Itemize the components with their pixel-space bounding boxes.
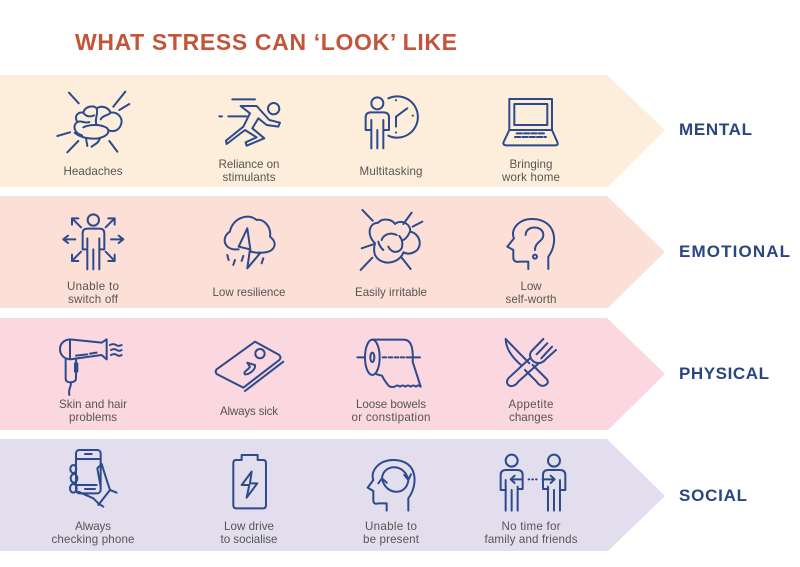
label: always checking phone bbox=[52, 520, 134, 546]
label: no time for family and friends bbox=[484, 520, 578, 546]
icon: storm cloud bbox=[225, 217, 275, 268]
label: no time for family and friends: No time for bbox=[502, 520, 561, 533]
mental arrow band bbox=[0, 75, 665, 187]
physical heading: PHYSICAL bbox=[679, 364, 769, 383]
label: loose bowels or constipation: Loose bowels bbox=[356, 398, 426, 411]
icon: running figure bbox=[219, 99, 280, 146]
icon: hand holding phone bbox=[70, 450, 117, 507]
label: always sick: Always sick bbox=[220, 405, 278, 418]
label: reliance on stimulants bbox=[218, 158, 280, 184]
icon: head with circular arrows bbox=[368, 460, 415, 511]
label: unable to switch off: switch off bbox=[68, 293, 119, 306]
icon: head with question mark bbox=[507, 219, 554, 269]
panel: physical bbox=[0, 318, 769, 430]
panel: emotional bbox=[0, 196, 790, 308]
social heading: SOCIAL bbox=[679, 486, 747, 505]
label: unable to be present: Unable to bbox=[365, 520, 417, 533]
label: appetite changes bbox=[508, 398, 554, 424]
label: unable to be present bbox=[363, 520, 420, 546]
label: low self-worth: self-worth bbox=[506, 293, 556, 306]
label: low drive to socialise bbox=[220, 520, 278, 546]
label: low self-worth bbox=[506, 280, 556, 306]
label: no time for family and friends: family and friends bbox=[484, 533, 578, 546]
label: bringing work home: work home bbox=[501, 171, 560, 184]
label: unable to switch off bbox=[67, 280, 119, 306]
label: skin and hair problems: problems bbox=[69, 411, 117, 424]
title: WHAT STRESS CAN ‘LOOK’ LIKE bbox=[75, 29, 457, 55]
emotional arrow band bbox=[0, 196, 665, 308]
label: appetite changes: Appetite bbox=[508, 398, 554, 411]
physical arrow band bbox=[0, 318, 665, 430]
label: unable to switch off: Unable to bbox=[67, 280, 119, 293]
label: bringing work home bbox=[501, 158, 560, 184]
icon: laptop bbox=[503, 99, 558, 145]
panel: social bbox=[0, 439, 747, 551]
label: headaches: Headaches bbox=[64, 165, 123, 178]
icon: irritable cloud with rays bbox=[361, 210, 422, 270]
label: easily irritable: Easily irritable bbox=[355, 286, 427, 299]
emotional heading: EMOTIONAL bbox=[679, 242, 790, 261]
label: multitasking: Multitasking bbox=[360, 165, 422, 178]
label: always checking phone: checking phone bbox=[52, 533, 134, 546]
label: reliance on stimulants: Reliance on bbox=[218, 158, 280, 171]
label: skin and hair problems: Skin and hair bbox=[59, 398, 127, 411]
label: low self-worth: Low bbox=[520, 280, 542, 293]
label: loose bowels or constipation bbox=[352, 398, 430, 424]
label: low resilience: Low resilience bbox=[212, 286, 286, 299]
icon: headaches brain bbox=[57, 92, 129, 152]
label: always checking phone: Always bbox=[75, 520, 111, 533]
icon: hair dryer bbox=[60, 339, 122, 395]
label: skin and hair problems bbox=[59, 398, 127, 424]
icon: crossed knife and fork bbox=[506, 339, 556, 386]
label: reliance on stimulants: stimulants bbox=[222, 171, 276, 184]
icon: low battery bbox=[233, 455, 266, 508]
social arrow band bbox=[0, 439, 665, 551]
mental heading: MENTAL bbox=[679, 120, 752, 139]
label: bringing work home: Bringing bbox=[510, 158, 552, 171]
label: unable to be present: be present bbox=[363, 533, 420, 546]
icon: multitasking person and clock bbox=[366, 96, 418, 148]
label: loose bowels or constipation: or constipation bbox=[352, 411, 430, 424]
label: low drive to socialise: to socialise bbox=[220, 533, 278, 546]
label: appetite changes: changes bbox=[509, 411, 553, 424]
icon: two people apart bbox=[501, 455, 565, 511]
label: low drive to socialise: Low drive bbox=[224, 520, 274, 533]
icon: figure lying in bed bbox=[216, 342, 283, 391]
icon: person with arrows bbox=[63, 214, 123, 269]
icon: toilet roll bbox=[357, 340, 421, 387]
panel: mental bbox=[0, 75, 752, 187]
